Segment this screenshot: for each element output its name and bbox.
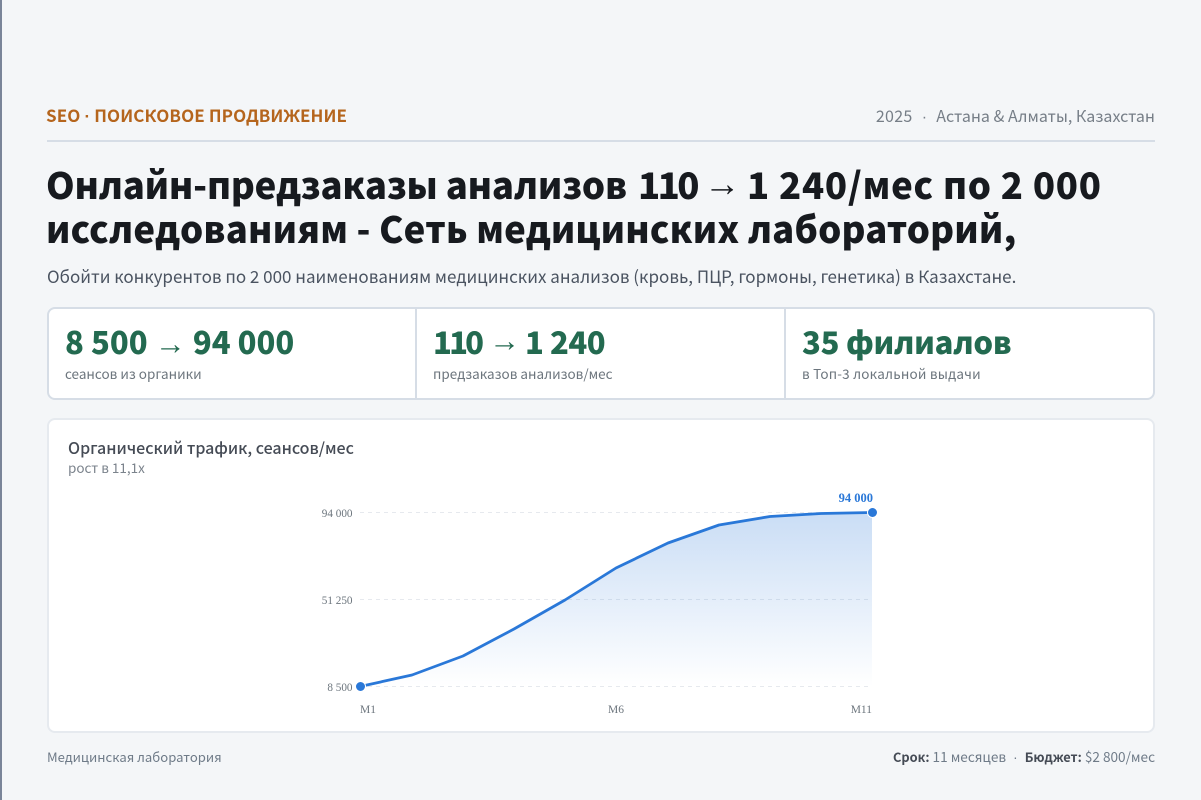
KPI 2 value: 1 240 [525, 318, 605, 363]
KPI 2 value: 110 [433, 318, 481, 363]
divider 2 [784, 309, 786, 398]
title: исследованиям - Сеть медицинских лабораторий, [46, 201, 1016, 254]
footer left: Медицинская лаборатория [47, 747, 222, 766]
KPI 2 value: → [489, 323, 520, 358]
KPI 3 label: в Топ-3 локальной выдачи [802, 363, 981, 383]
y axis labels [322, 508, 353, 694]
y axis labels: 51 250 [322, 595, 353, 607]
KPI 3 value: 35 филиалов [802, 318, 1011, 363]
KPI 2 value [433, 318, 605, 363]
y axis labels: 94 000 [322, 508, 353, 520]
x axis labels [360, 704, 872, 716]
x axis labels: M1 [360, 704, 376, 716]
title: Онлайн-предзаказы анализов [46, 157, 627, 210]
location and year: 2025 · Астана & Алматы, Казахстан [876, 103, 1155, 127]
title [46, 157, 1102, 254]
KPI 1 value: 8 500 → 94 000 [65, 318, 294, 363]
x axis labels: M11 [851, 704, 872, 716]
title: 1 240/мес по 2 000 [747, 157, 1102, 210]
KPI 2 label: предзаказов анализов/мес [433, 363, 613, 383]
y axis labels: 8 500 [327, 682, 353, 694]
grid lines [360, 512, 872, 686]
subtitle: Обойти конкурентов по 2 000 наименованиям медицинских анализов (кровь, ПЦР, гормоны, генетика) в Казахстане. [47, 263, 1016, 288]
start point [356, 682, 366, 692]
area fill [360, 512, 872, 686]
divider 1 [415, 309, 417, 398]
eyebrow: category: SEO · ПОИСКОВОЕ ПРОДВИЖЕНИЕ [46, 102, 347, 127]
traffic line [360, 512, 872, 686]
left edge line [0, 0, 2, 800]
panel: KPI cards [47, 307, 1155, 400]
title: → [704, 163, 740, 204]
title: 110 [638, 157, 697, 210]
chart subtitle: рост в 11,1х [68, 457, 145, 477]
header rule [47, 140, 1155, 142]
panel: chart card [47, 418, 1155, 733]
footer right: Срок: 11 месяцев · Бюджет: $2 800/мес [893, 746, 1155, 766]
KPI 1 label: сеансов из органики [65, 363, 202, 383]
x axis labels: M6 [608, 704, 624, 716]
end point [868, 508, 878, 518]
chart title: Органический трафик, сеансов/мес [68, 435, 354, 459]
end value label: 94 000 [839, 491, 873, 505]
